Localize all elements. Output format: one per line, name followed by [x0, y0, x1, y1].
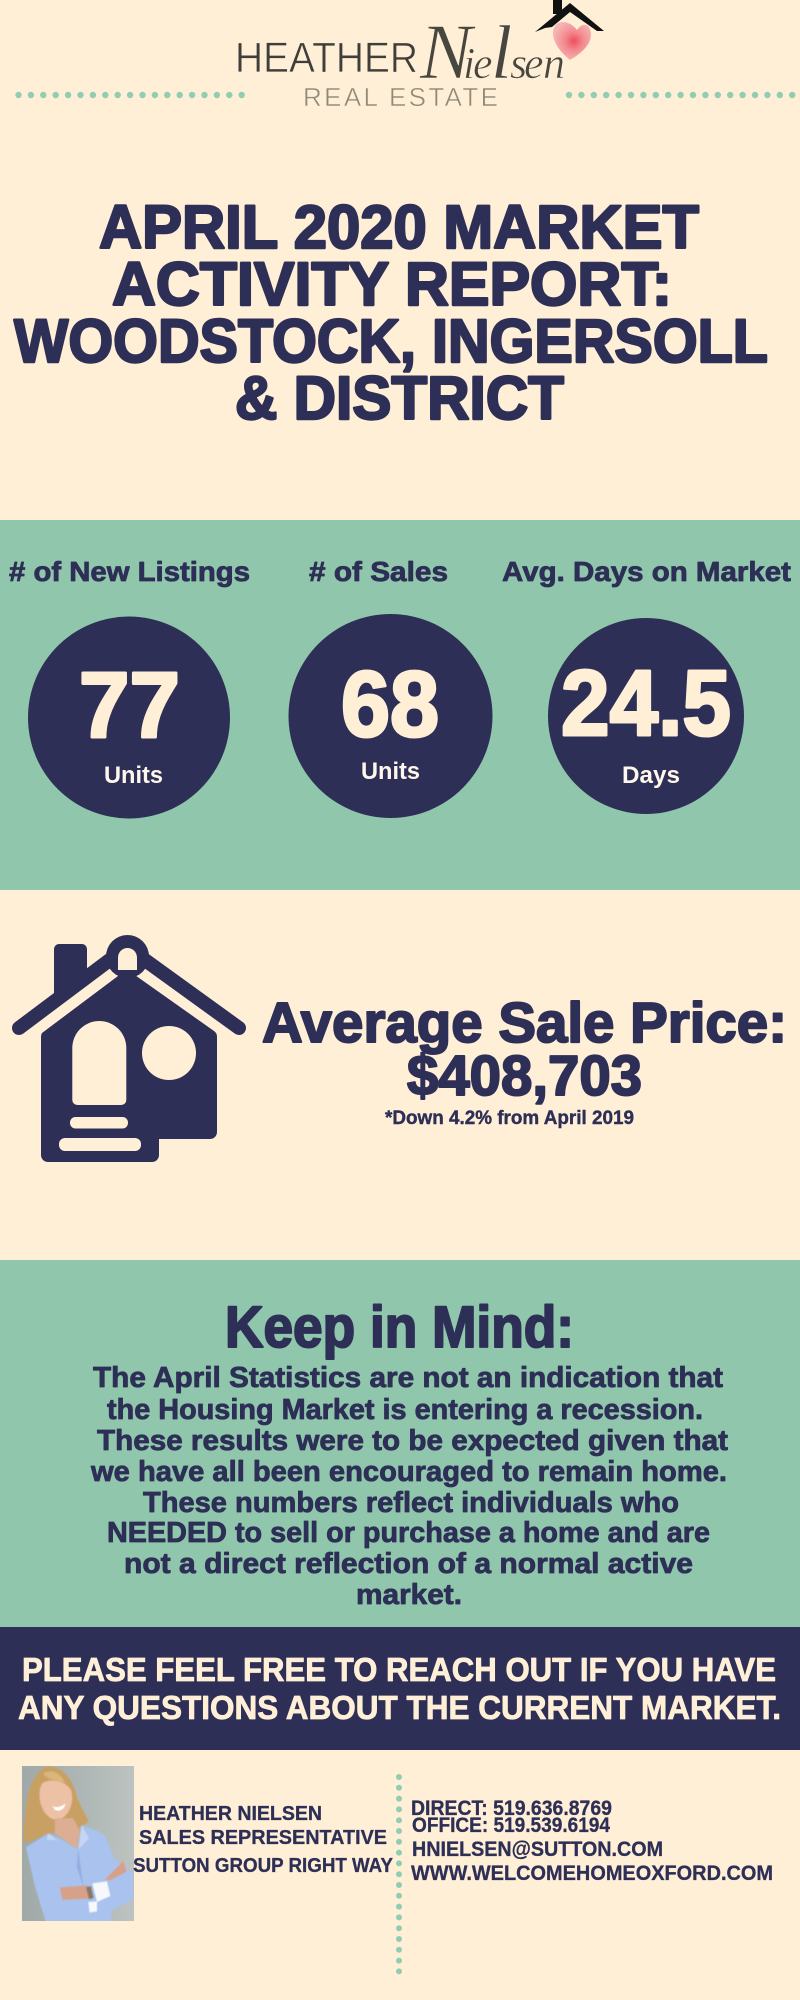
panel: call to action: PLEASE FEEL FREE TO REACH OUT IF YOU HAVE [22, 1651, 776, 1688]
logo: Heather Nielsen Real Estate [235, 0, 604, 112]
agent details [133, 1803, 394, 1877]
heading: keep in mind: Keep in Mind: [225, 1295, 574, 1360]
agent details: SUTTON GROUP RIGHT WAY [133, 1855, 394, 1877]
contact details: DIRECT: 519.636.8769 [411, 1797, 612, 1820]
logo script: Nielsen: N [419, 8, 476, 95]
stat heading: sales: # of Sales [309, 556, 448, 587]
title [14, 193, 768, 432]
title: APRIL 2020 MARKET [99, 193, 699, 261]
contact details: WWW.WELCOMEHOMEOXFORD.COM [411, 1862, 773, 1885]
panel: call to action [0, 1627, 800, 1750]
average sale price [262, 991, 787, 1129]
logo script: Nielsen: e [524, 39, 544, 88]
average sale price: *Down 4.2% from April 2019 [385, 1108, 634, 1129]
stat heading: new listings: # of New Listings [9, 556, 250, 587]
panel: keep in mind [0, 1260, 800, 1627]
logo script: Nielsen: s [510, 39, 527, 88]
logo script: Nielsen: l [491, 11, 512, 95]
title: WOODSTOCK, INGERSOLL [14, 307, 768, 375]
average sale price: $408,703 [407, 1044, 642, 1108]
contact details: HNIELSEN@SUTTON.COM [412, 1838, 663, 1861]
stat circle: 68 units: 68 [341, 652, 439, 756]
logo subtitle: Real Estate: REAL ESTATE [303, 82, 498, 112]
stat circle: 68 units: Units [361, 758, 420, 785]
dotted divider vertical [396, 1777, 402, 1972]
body text: These numbers reflect individuals who [143, 1487, 679, 1519]
stat circle: 77 units: 77 [79, 653, 180, 757]
panel: key stats [0, 520, 800, 890]
body text: The April Statistics are not an indication that [93, 1362, 723, 1394]
stat heading: days on market: Avg. Days on Market [502, 556, 791, 587]
title: ACTIVITY REPORT: [112, 250, 672, 318]
body text [90, 1362, 728, 1611]
body text: not a direct reflection of a normal active [124, 1548, 693, 1580]
icon: logo heart [553, 22, 591, 60]
agent details: HEATHER NIELSEN [139, 1803, 322, 1825]
icon: logo chimney [553, 0, 562, 14]
title: & DISTRICT [235, 364, 564, 432]
stat circle: 77 units [28, 616, 230, 818]
body text: These results were to be expected given that [97, 1425, 728, 1457]
contact details [411, 1797, 773, 1885]
dotted divider right [569, 92, 793, 98]
body text: market. [356, 1579, 462, 1611]
stat circle: 24.5 days: Days [622, 762, 680, 789]
stat circle: 24.5 days: 24.5 [561, 651, 731, 755]
logo wordmark: Heather: HEATHER [235, 34, 418, 82]
icon: house [19, 935, 239, 1162]
logo script: Nielsen: n [543, 39, 565, 88]
body text: the Housing Market is entering a recession. [107, 1394, 703, 1426]
body text: we have all been encouraged to remain home. [90, 1456, 727, 1488]
agent photo [22, 1766, 134, 1922]
stat circle: 77 units: Units [104, 762, 163, 789]
panel: call to action: ANY QUESTIONS ABOUT THE CURRENT MARKET. [18, 1689, 781, 1726]
stat circle: 24.5 days [548, 618, 744, 814]
body text: NEEDED to sell or purchase a home and are [107, 1517, 710, 1549]
average sale price: Average Sale Price: [262, 991, 787, 1055]
contact details: OFFICE: 519.539.6194 [412, 1814, 610, 1837]
agent details: SALES REPRESENTATIVE [139, 1827, 387, 1849]
logo script: Nielsen: e [473, 39, 493, 88]
icon: logo roof [535, 3, 604, 32]
stat circle: 68 units [288, 614, 492, 818]
dotted divider left [18, 92, 242, 98]
logo script: Nielsen: i [463, 39, 475, 88]
